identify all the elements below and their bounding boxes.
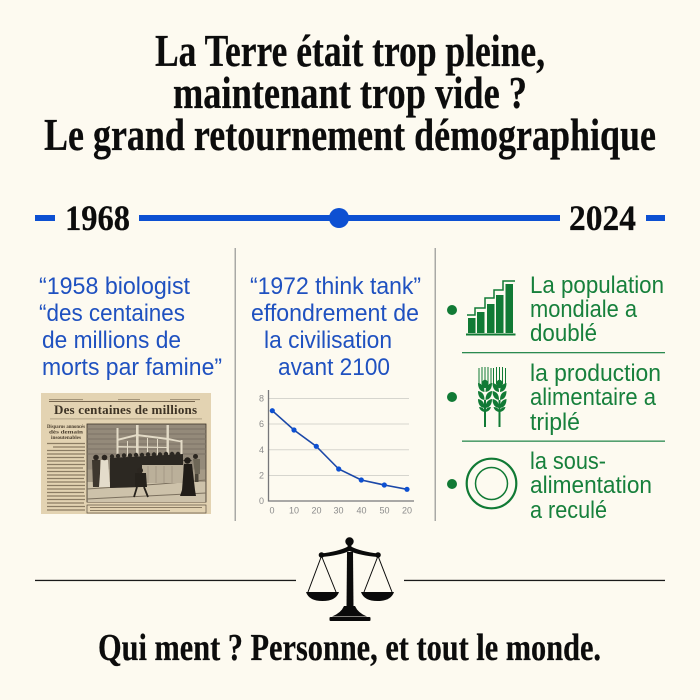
timeline 1968 to 2024: 1968	[65, 198, 130, 238]
text: undernourishment: la sous-	[530, 448, 606, 475]
text: 1958 biologist quote: “des centaines	[39, 300, 185, 327]
text: food production: alimentaire a	[530, 384, 657, 411]
line chart: 20	[312, 506, 322, 516]
newspaper clipping: dès demain	[49, 430, 83, 436]
newspaper clipping: Disparus annoncés	[47, 424, 85, 430]
title: La Terre était trop pleine,	[155, 25, 545, 76]
text: food production: la production	[530, 360, 661, 387]
text: 1972 think tank quote: la civilisation	[264, 327, 392, 354]
text: 1958 biologist quote: de millions de	[42, 327, 181, 354]
icon: balance scales	[306, 537, 394, 621]
bullet	[447, 479, 457, 489]
line chart: 40	[356, 506, 367, 516]
text: population: mondiale a	[530, 296, 638, 323]
text: 1972 think tank quote: avant 2100	[278, 354, 390, 381]
icon: wheat	[478, 367, 506, 427]
newspaper clipping: insoutenables	[51, 435, 81, 441]
text: undernourishment	[530, 448, 652, 524]
panel: green facts	[447, 272, 665, 524]
line chart: 4	[259, 445, 264, 455]
title: maintenant trop vide ?	[173, 67, 527, 118]
icon: rising bars	[466, 281, 516, 336]
line chart: 30	[334, 506, 344, 516]
panel: 1972 think tank	[250, 273, 421, 516]
panel: 1958 biologist	[39, 273, 222, 514]
text: 1972 think tank quote: “1972 think tank”	[250, 273, 421, 300]
text: 1972 think tank quote: effondrement de	[251, 300, 419, 327]
line chart: 0	[270, 506, 275, 516]
timeline 1968 to 2024	[35, 198, 665, 238]
newspaper clipping	[41, 393, 211, 514]
line chart: 6	[259, 419, 264, 429]
title	[44, 25, 656, 160]
text: undernourishment: a reculé	[530, 497, 607, 524]
line chart: 8	[259, 394, 264, 404]
bullet	[447, 305, 457, 315]
text: 1972 think tank quote	[250, 273, 421, 381]
line chart: 0	[259, 496, 264, 506]
line chart: 20	[402, 506, 412, 516]
newspaper clipping: Des centaines de millions	[54, 402, 197, 417]
text: food production: triplé	[530, 409, 580, 436]
line chart	[259, 390, 414, 516]
text: population: doublé	[530, 320, 597, 347]
line chart: 10	[289, 506, 299, 516]
timeline 1968 to 2024: 2024	[569, 198, 636, 238]
text: population: La population	[530, 272, 664, 299]
line chart: 50	[380, 506, 390, 516]
icon: plate	[467, 459, 516, 508]
text: undernourishment: alimentation	[530, 472, 652, 499]
line chart: 2	[259, 470, 264, 480]
text: 1958 biologist quote: “1958 biologist	[39, 273, 190, 300]
text: food production	[530, 360, 661, 436]
crowd	[110, 452, 183, 488]
pavilion	[116, 425, 182, 458]
text: 1958 biologist quote	[39, 273, 222, 381]
text: population	[530, 272, 664, 347]
bullet	[447, 392, 457, 402]
text: 1958 biologist quote: morts par famine”	[42, 354, 222, 381]
